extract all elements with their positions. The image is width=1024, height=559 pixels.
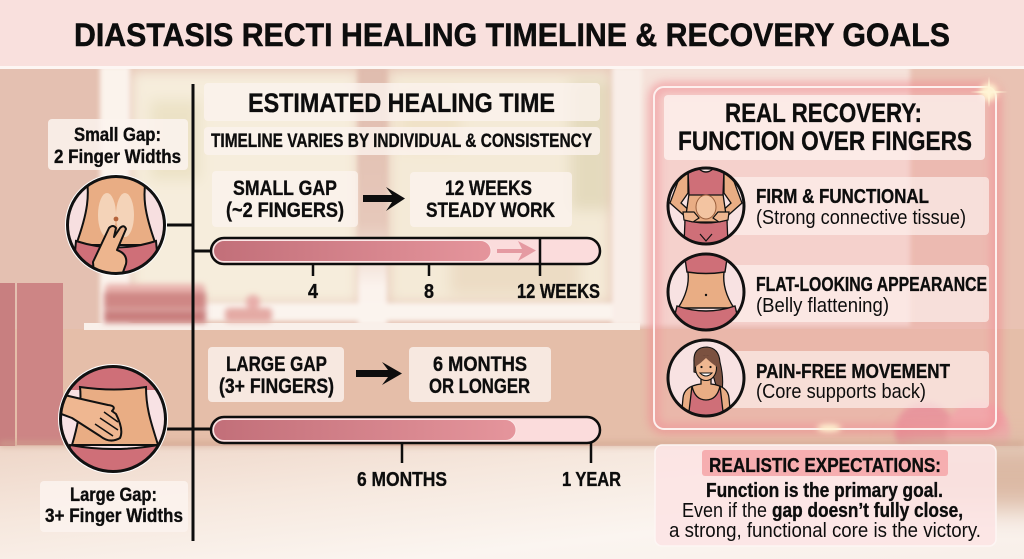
- row: pain-free movement: [728, 351, 989, 408]
- label: 12 weeks steady work: STEADY WORK: [426, 199, 555, 222]
- subheading: timeline varies: TIMELINE VARIES BY INDIVIDUAL & CONSISTENCY: [211, 131, 592, 152]
- progress bar: 12 weeks: 12 WEEKS: [517, 281, 600, 303]
- icon: two fingers measuring small gap: [65, 174, 167, 276]
- icon: smiling woman: [667, 339, 745, 420]
- panel heading: FUNCTION OVER FINGERS: [678, 126, 972, 156]
- label: small gap: [48, 119, 188, 170]
- label: large gap 3+ fingers: (3+ FINGERS): [219, 375, 334, 398]
- callout: realistic expectations: [655, 445, 996, 546]
- yoga mats: [0, 283, 63, 446]
- heading: estimated healing time: ESTIMATED HEALING TIME: [248, 88, 555, 118]
- label: large gap 3+ fingers: LARGE GAP: [226, 353, 327, 376]
- label: small gap: Small Gap:: [74, 125, 161, 146]
- towels: [104, 284, 206, 323]
- row: firm and functional: FIRM & FUNCTIONAL: [756, 186, 929, 208]
- callout heading: REALISTIC EXPECTATIONS:: [709, 454, 941, 477]
- arrow inside bar: [497, 241, 536, 261]
- callout: realistic expectations: Function is the primary goal.: [706, 480, 943, 502]
- icon: flat belly: [667, 252, 745, 335]
- header band: [0, 0, 1024, 69]
- label: large gap: Large Gap:: [70, 485, 157, 506]
- title: DIASTASIS RECTI HEALING TIMELINE & RECOVERY GOALS: [74, 17, 950, 53]
- progress bar: 12 weeks: 8: [424, 281, 434, 303]
- panel heading: [664, 95, 985, 160]
- label: large gap: 3+ Finger Widths: [45, 506, 183, 527]
- row: pain-free movement: (Core supports back): [756, 381, 926, 403]
- vertical timeline axis and connectors: [167, 84, 211, 541]
- label: small gap: 2 Finger Widths: [54, 147, 181, 168]
- icon: hand on belly large gap: [58, 364, 168, 474]
- row: firm and functional: [728, 177, 989, 235]
- arrow: small gap to 12 weeks: [363, 187, 405, 211]
- label: small gap 2 fingers: [212, 171, 358, 227]
- label: 12 weeks steady work: 12 WEEKS: [445, 177, 532, 200]
- glints: [817, 76, 1008, 432]
- row: flat-looking appearance: [728, 265, 989, 322]
- callout: realistic expectations: gap doesn’t fully close,: [772, 500, 963, 522]
- subheading: timeline varies: [204, 127, 600, 155]
- label: 6 months or longer: 6 MONTHS: [433, 353, 527, 376]
- label: 6 months or longer: [409, 347, 551, 402]
- heading: estimated healing time: [204, 83, 600, 121]
- progress bar: 12 weeks: 4: [308, 281, 319, 303]
- dumbbells: [225, 295, 272, 322]
- row: firm and functional: (Strong connective tissue): [756, 207, 966, 229]
- label: 12 weeks steady work: [410, 172, 572, 227]
- row: pain-free movement: PAIN-FREE MOVEMENT: [756, 361, 950, 383]
- label: large gap: [40, 481, 188, 532]
- progress bar: 1 year: 6 MONTHS: [357, 469, 447, 491]
- arrow: large gap to 6 months: [356, 362, 402, 385]
- callout: realistic expectations: Even if the: [682, 500, 767, 522]
- callout: realistic expectations: a strong, functional core is the victory.: [669, 520, 981, 542]
- progress bar: 12 weeks: [211, 238, 600, 303]
- panel heading: REAL RECOVERY:: [725, 98, 922, 128]
- label: small gap 2 fingers: SMALL GAP: [233, 177, 337, 200]
- row: flat-looking appearance: (Belly flattening): [756, 295, 889, 317]
- label: large gap 3+ fingers: [208, 347, 344, 402]
- icon: firm torso: [667, 167, 745, 245]
- panel: real recovery: [654, 76, 1008, 432]
- progress bar: 1 year: 1 YEAR: [562, 469, 621, 491]
- label: 6 months or longer: OR LONGER: [429, 375, 530, 398]
- progress bar: 1 year: [211, 417, 621, 491]
- label: small gap 2 fingers: (~2 FINGERS): [226, 199, 344, 222]
